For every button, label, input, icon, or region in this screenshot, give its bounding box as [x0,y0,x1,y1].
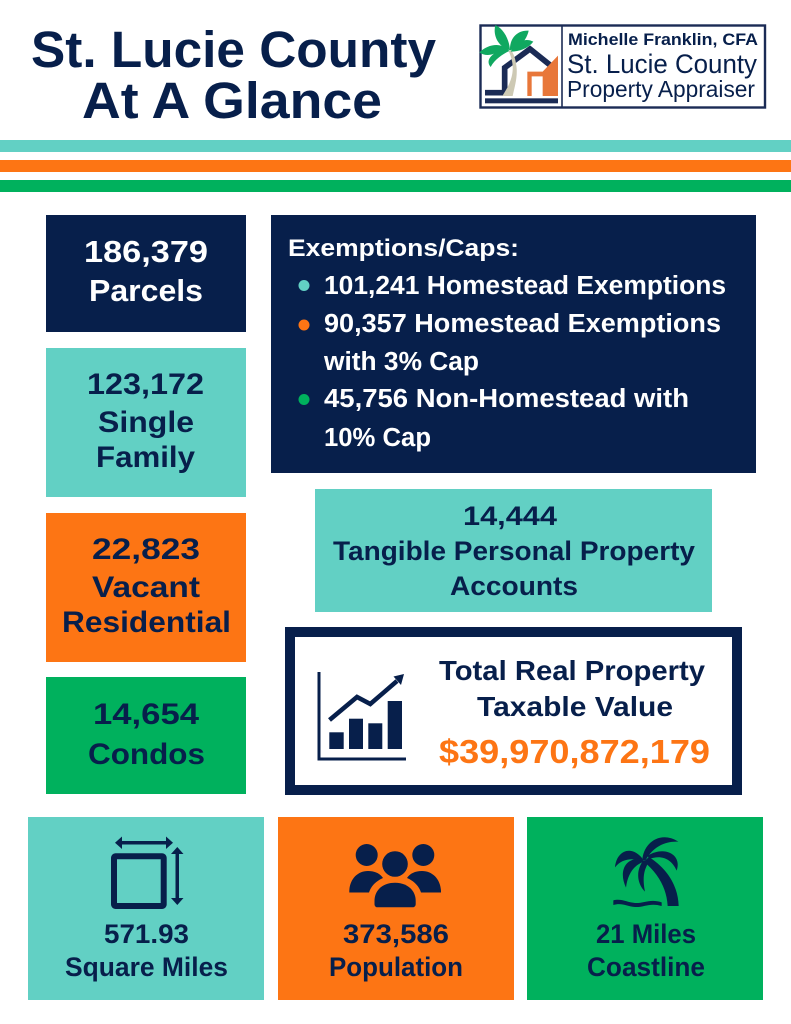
panel: condos: Condos [88,738,205,771]
panel: parcels: 186,379 [84,234,208,269]
panel: tangible personal property: 14,444 [463,501,557,531]
heading: exemptions: Exemptions/Caps: [288,235,519,262]
icon: rising bar chart [319,672,406,759]
list item: 10% cap: 10% Cap [324,424,431,452]
icon: palm tree [613,837,679,907]
orange stripe [0,160,791,172]
logo: St. Lucie County Property Appraiser [479,25,765,108]
title: At A Glance [82,72,382,129]
panel: square miles: 571.93 [104,919,189,949]
teal stripe [0,140,791,152]
panel: tangible personal property [315,489,712,612]
panel: tangible personal property: Accounts [450,571,578,601]
panel: vacant residential: Vacant [92,571,200,604]
panel: single family: Single [98,406,194,439]
panel: single family [46,348,246,497]
list item: 10% cap [298,385,689,452]
list item: 3% cap [298,310,721,376]
panel: population [278,817,514,1000]
list item: 3% cap: with 3% Cap [323,348,479,376]
panel: vacant residential [46,513,246,662]
panel: square miles [28,817,264,1000]
panel: vacant residential: 22,823 [92,533,200,566]
panel: total taxable value: $39,970,872,179 [439,733,710,770]
panel: square miles: Square Miles [65,952,228,982]
panel: condos: 14,654 [93,698,199,731]
panel: exemptions and caps [271,215,756,473]
panel: single family: 123,172 [87,368,204,401]
list item: homestead: 101,241 Homestead Exemptions [324,272,726,300]
logo: St. Lucie County Property Appraiser: St. Lucie County [567,49,757,79]
panel: single family: Family [96,441,195,474]
panel: total taxable value: Taxable Value [477,691,673,722]
panel: coastline [527,817,763,1000]
icon: house and palm [479,25,558,103]
panel: total taxable value: Total Real Property [439,655,705,686]
logo: St. Lucie County Property Appraiser: Property Appraiser [567,76,755,102]
title [31,21,437,129]
icon: square with dimension arrows [114,836,184,906]
panel: total taxable value [290,632,737,790]
panel: parcels: Parcels [89,273,203,308]
list item: 3% cap: 90,357 Homestead Exemptions [324,310,721,338]
panel: coastline: 21 Miles [596,919,696,949]
list item: 10% cap: 45,756 Non-Homestead with [324,385,689,413]
panel: tangible personal property: Tangible Personal Property [333,536,695,566]
green stripe [0,180,791,192]
panel: population: 373,586 [343,919,449,949]
title: St. Lucie County [31,21,437,78]
panel: population: Population [329,952,463,982]
panel: parcels [46,215,246,332]
panel: vacant residential: Residential [62,606,231,639]
panel: condos [46,677,246,794]
logo: St. Lucie County Property Appraiser: Michelle Franklin, CFA [568,30,758,49]
icon: group of people [349,844,441,907]
panel: coastline: Coastline [587,952,705,982]
